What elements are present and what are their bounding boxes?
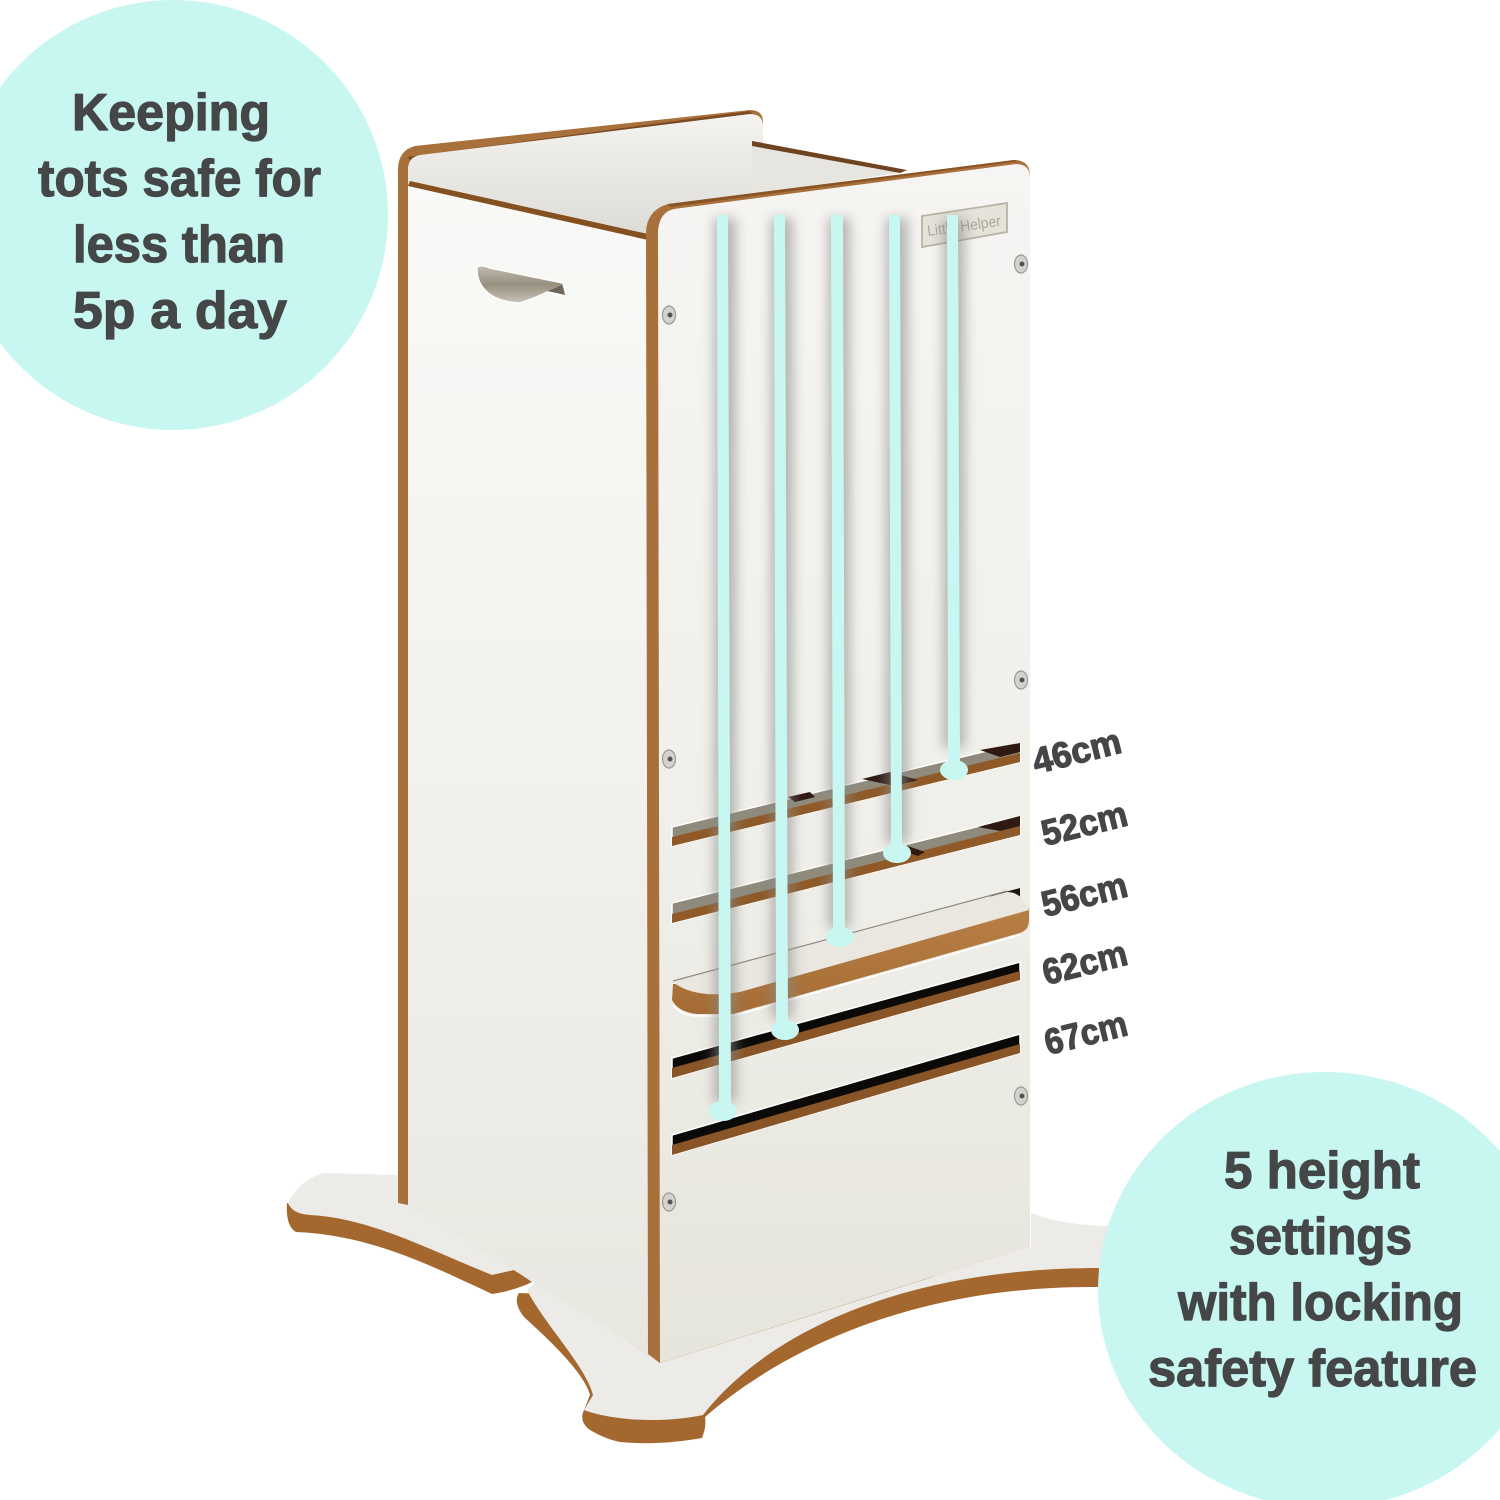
left panel top edge <box>408 181 648 240</box>
callout: height settings: with locking <box>1177 1274 1463 1332</box>
height slot 3 with step shelf <box>672 888 1029 1016</box>
back panel <box>398 110 763 1205</box>
callout: safety cost: Keeping <box>72 84 270 142</box>
height slot 5 <box>672 1034 1020 1155</box>
height slot 4 <box>672 962 1020 1078</box>
label 67cm: 67cm <box>1040 1003 1131 1063</box>
label 46cm: 46cm <box>1028 720 1125 782</box>
marker line 52cm <box>883 215 911 863</box>
callout: safety cost <box>0 0 388 430</box>
marker line 46cm <box>940 215 968 780</box>
callout: height settings <box>1098 1072 1500 1500</box>
callout: height settings: settings <box>1229 1208 1412 1266</box>
marker line 62cm <box>771 215 799 1040</box>
callout: height settings: safety feature <box>1148 1340 1477 1398</box>
brand plate: Little Helper <box>926 213 1002 240</box>
marker line 67cm <box>709 215 737 1121</box>
height labels <box>1028 720 1131 1063</box>
height marker lines <box>709 215 968 1121</box>
height slot 1 <box>672 743 1020 846</box>
callout: safety cost: less than <box>73 216 285 274</box>
brand plate <box>922 203 1007 247</box>
product: learning tower <box>287 110 1110 1443</box>
handle <box>477 266 566 303</box>
height slot 2 <box>672 816 1020 923</box>
callout: safety cost: tots safe for <box>38 150 321 208</box>
label 52cm: 52cm <box>1037 793 1131 854</box>
base: left foot <box>287 1173 532 1294</box>
base: front foot <box>517 1213 1110 1443</box>
front panel <box>646 160 1030 1363</box>
callout: height settings: 5 height <box>1224 1142 1420 1200</box>
label 62cm: 62cm <box>1038 932 1131 993</box>
right side interior <box>660 141 907 208</box>
screws <box>662 255 1028 1211</box>
label 56cm: 56cm <box>1037 864 1131 925</box>
marker line 56cm <box>826 215 854 947</box>
left side panel <box>408 185 648 1354</box>
callout: safety cost: 5p a day <box>73 282 287 340</box>
